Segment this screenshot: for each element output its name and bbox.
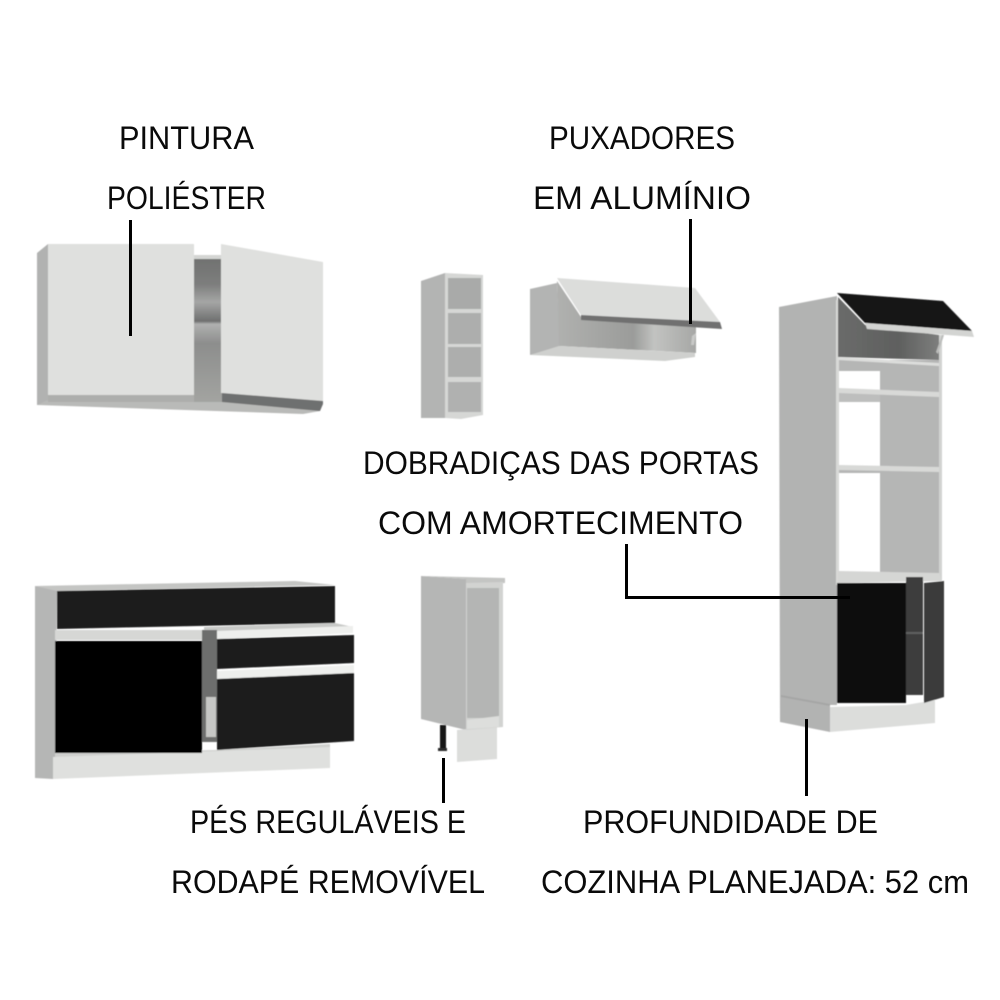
flip-up wall cabinet (530, 278, 722, 361)
flip cabinet interior (557, 281, 696, 353)
niche tower (421, 273, 483, 419)
line: pés (442, 758, 445, 803)
narrow top (421, 576, 505, 585)
niche side (421, 273, 445, 418)
label: pintura poliéster (107, 120, 266, 216)
flip cabinet bottom (530, 346, 695, 361)
line: puxadores (689, 219, 692, 324)
right door (221, 244, 323, 402)
flip cabinet handle (581, 315, 722, 329)
sink front panel (57, 586, 335, 629)
base left door (55, 641, 202, 753)
upper cabinet with two doors (37, 244, 323, 414)
label: profundidade: PROFUNDIDADE DE (583, 804, 878, 840)
flip cabinet door (557, 278, 720, 322)
tower door (837, 293, 972, 331)
label: pés reguláveis (171, 804, 485, 900)
tower side (779, 296, 837, 732)
tower door handle (865, 323, 974, 337)
upper drawer handle (217, 626, 353, 639)
niche front (445, 273, 483, 419)
niche cells (448, 278, 481, 309)
narrow front frame (466, 582, 503, 730)
narrow plinth (457, 726, 497, 762)
sink base cabinet (35, 581, 354, 779)
label: pintura poliéster: POLIÉSTER (107, 180, 266, 216)
leader lines (129, 219, 850, 803)
tower frame strips (836, 300, 839, 585)
label: pés reguláveis: PÉS REGULÁVEIS E (190, 804, 466, 840)
plinth (830, 700, 935, 732)
tower shelves (838, 357, 939, 366)
narrow base cabinet (421, 576, 505, 762)
cabinet interior (194, 255, 222, 402)
label: puxadores em alumínio (533, 120, 751, 216)
adjustable leg (440, 725, 446, 749)
label: puxadores em alumínio: EM ALUMÍNIO (533, 180, 751, 216)
label: profundidade (541, 804, 969, 900)
label: pés reguláveis: RODAPÉ REMOVÍVEL (171, 864, 485, 900)
label: dobradiças das portas (363, 445, 759, 541)
narrow interior (467, 588, 499, 718)
label: puxadores em alumínio: PUXADORES (549, 120, 735, 156)
base top (35, 581, 335, 591)
lower drawer (217, 673, 354, 750)
cabinet bottom edge (37, 400, 320, 414)
line: pintura (129, 220, 132, 336)
drawer cavity (202, 630, 217, 742)
light strip (55, 630, 204, 640)
line: profundidade (805, 719, 808, 796)
line: dobradiças (625, 544, 850, 599)
upper drawer (217, 635, 354, 669)
narrow side (421, 576, 466, 730)
tower open door (924, 581, 944, 703)
lower drawer handle (217, 665, 354, 679)
base plinth (53, 745, 330, 779)
label: profundidade: COZINHA PLANEJADA: 52 cm (541, 864, 969, 900)
left door (48, 244, 194, 395)
right door handle (222, 393, 323, 411)
base side (35, 586, 57, 779)
tower black door (837, 583, 906, 703)
tower right back panels (880, 360, 939, 573)
label: pintura poliéster: PINTURA (119, 120, 255, 156)
upper dark compartment (838, 297, 939, 360)
tall oven tower (779, 293, 974, 732)
label: dobradiças das portas: COM AMORTECIMENTO (378, 505, 743, 541)
flip cabinet side (530, 283, 560, 355)
tower interior dark (906, 577, 923, 695)
label: dobradiças das portas: DOBRADIÇAS DAS PORTAS (363, 445, 759, 481)
side panel (37, 244, 48, 405)
